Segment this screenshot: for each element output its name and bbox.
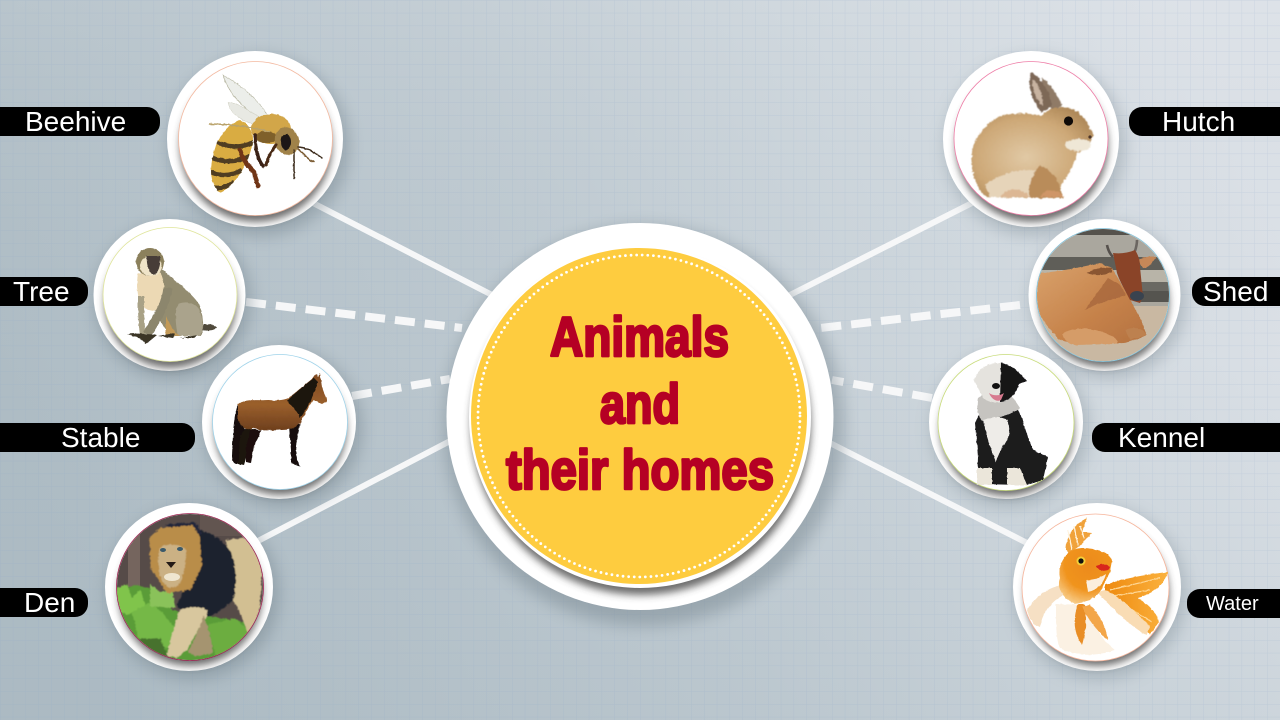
label: Kennel bbox=[1092, 422, 1280, 453]
icon: cow bbox=[1037, 229, 1170, 361]
icon: goldfish bbox=[1027, 518, 1168, 655]
label: Stable bbox=[0, 422, 195, 453]
label: Beehive bbox=[0, 106, 160, 137]
label: Hutch: Hutch bbox=[1162, 106, 1235, 137]
title: and bbox=[600, 372, 680, 435]
label: Tree bbox=[0, 276, 88, 307]
centre circle bbox=[444, 223, 844, 626]
connector: lion to centre bbox=[256, 440, 452, 542]
label: Shed: Shed bbox=[1203, 276, 1268, 307]
label: Den: Den bbox=[24, 587, 75, 618]
connector: fish to centre bbox=[828, 442, 1027, 543]
goldfish eye bbox=[1076, 556, 1086, 566]
connector: bee to centre bbox=[313, 203, 496, 297]
bubble: rabbit bbox=[943, 51, 1125, 236]
dashed connector: dog to centre bbox=[832, 380, 932, 398]
dog nose and tongue bbox=[989, 383, 1004, 401]
bubble: dog bbox=[929, 345, 1089, 507]
bubble: monkey bbox=[94, 219, 251, 379]
label: Tree: Tree bbox=[13, 276, 70, 307]
bubble: lion bbox=[105, 503, 279, 679]
icon: horse bbox=[232, 373, 327, 466]
icon: rabbit bbox=[972, 72, 1093, 198]
bubble: cow bbox=[1028, 219, 1186, 379]
dashed connector: monkey to centre bbox=[246, 302, 462, 328]
bubble: fish bbox=[1013, 503, 1186, 679]
icon: bee bbox=[208, 75, 322, 193]
icon: monkey bbox=[127, 248, 217, 344]
label: Water: Water bbox=[1206, 593, 1259, 615]
label: Water bbox=[1187, 589, 1280, 618]
dashed connector: horse to centre bbox=[352, 379, 450, 396]
icon: lion bbox=[115, 512, 265, 662]
label: Hutch bbox=[1129, 106, 1280, 137]
yellow disc bbox=[471, 248, 807, 584]
icon: dog bbox=[974, 363, 1048, 485]
label: Kennel: Kennel bbox=[1118, 422, 1205, 453]
label: Stable: Stable bbox=[61, 422, 140, 453]
dashed connector: cow to centre bbox=[820, 305, 1020, 328]
label: Beehive: Beehive bbox=[25, 106, 126, 137]
bubble: bee bbox=[167, 51, 349, 236]
title: their homes bbox=[506, 438, 774, 501]
title: Animals bbox=[550, 305, 729, 368]
rabbit eye and nose bbox=[1064, 116, 1092, 139]
connector: rabbit to centre bbox=[786, 202, 974, 297]
bubble: horse bbox=[202, 345, 362, 507]
label: Den bbox=[0, 587, 88, 618]
title bbox=[506, 305, 774, 501]
